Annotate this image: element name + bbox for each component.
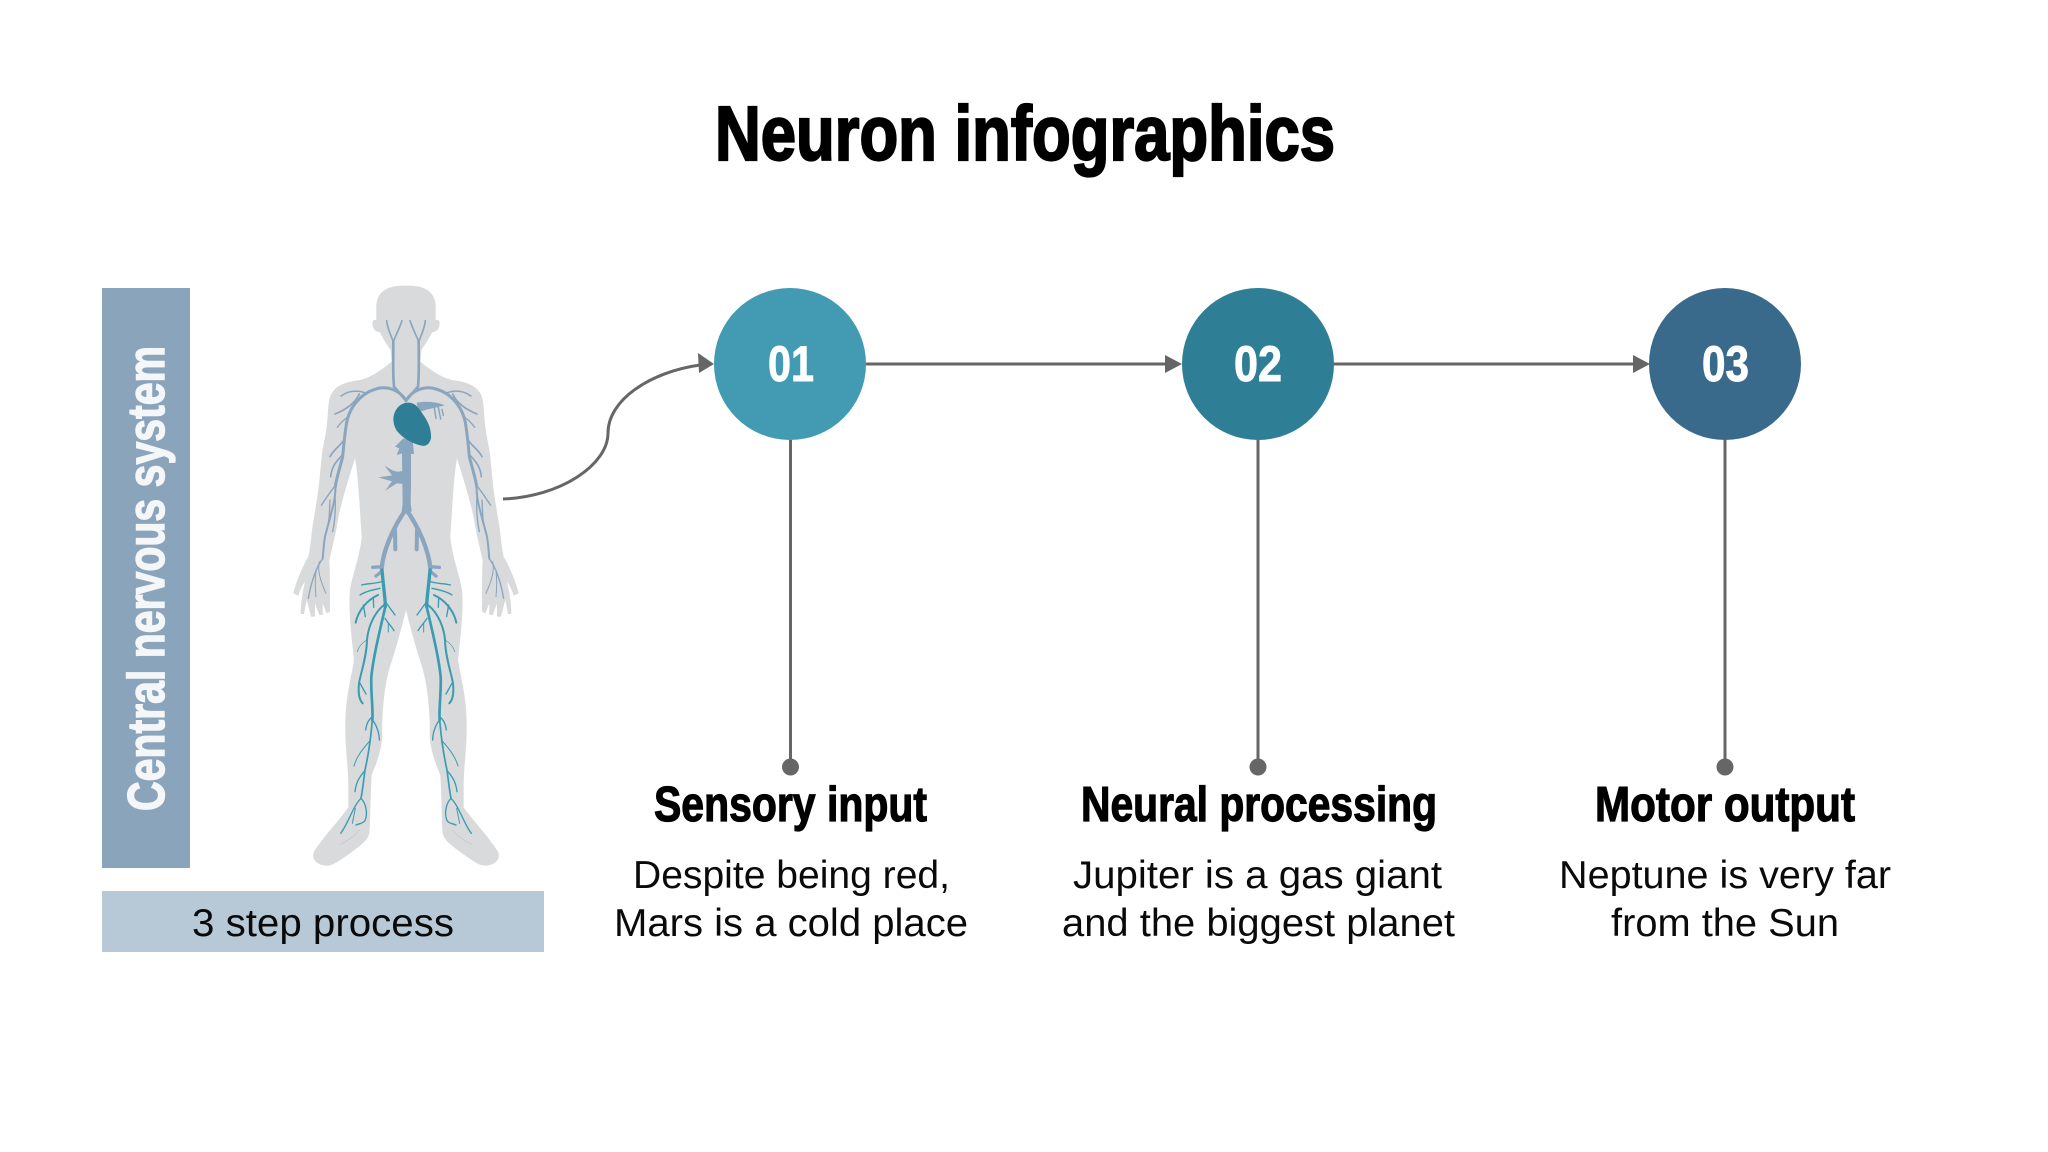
step 2 text [1062, 778, 1455, 945]
connector: step 2 [1250, 440, 1266, 776]
illustration: human body with nervous system [293, 286, 519, 866]
connector: step 1 [782, 440, 799, 776]
step circle 01: 01 [768, 336, 814, 392]
arrow: step 2 to step 3 [1334, 355, 1650, 373]
aorta and branches [378, 402, 445, 512]
title: Neuron infographics [715, 91, 1335, 177]
step 2 text: Jupiter is a gas giant [1073, 854, 1442, 897]
icon: heart [393, 403, 431, 446]
arrow: body to step 1 [503, 353, 714, 499]
caption box: 3 step process: 3 step process [192, 902, 454, 945]
step circle 03 [1649, 288, 1801, 440]
step circle 02: 02 [1234, 336, 1282, 392]
step 3 text [1559, 778, 1891, 945]
arrow: step 1 to step 2 [866, 355, 1182, 373]
panel: central nervous system vertical bar [102, 288, 190, 868]
step 2 text: Neural processing [1081, 778, 1437, 832]
step 3 text: from the Sun [1611, 902, 1839, 945]
step 1 text: Mars is a cold place [614, 902, 968, 945]
connector: step 3 [1716, 440, 1734, 776]
step 3 text: Motor output [1595, 778, 1855, 832]
step 3 text: Neptune is very far [1559, 854, 1891, 897]
step circle 03: 03 [1702, 336, 1749, 392]
caption box: 3 step process [102, 891, 544, 952]
step 1 text: Sensory input [654, 778, 927, 832]
step circle 01 [714, 288, 866, 440]
bar label: Central nervous system [118, 346, 176, 811]
step 2 text: and the biggest planet [1062, 902, 1455, 945]
step 1 text [614, 778, 968, 945]
step circle 02 [1182, 288, 1334, 440]
step 1 text: Despite being red, [633, 854, 950, 897]
